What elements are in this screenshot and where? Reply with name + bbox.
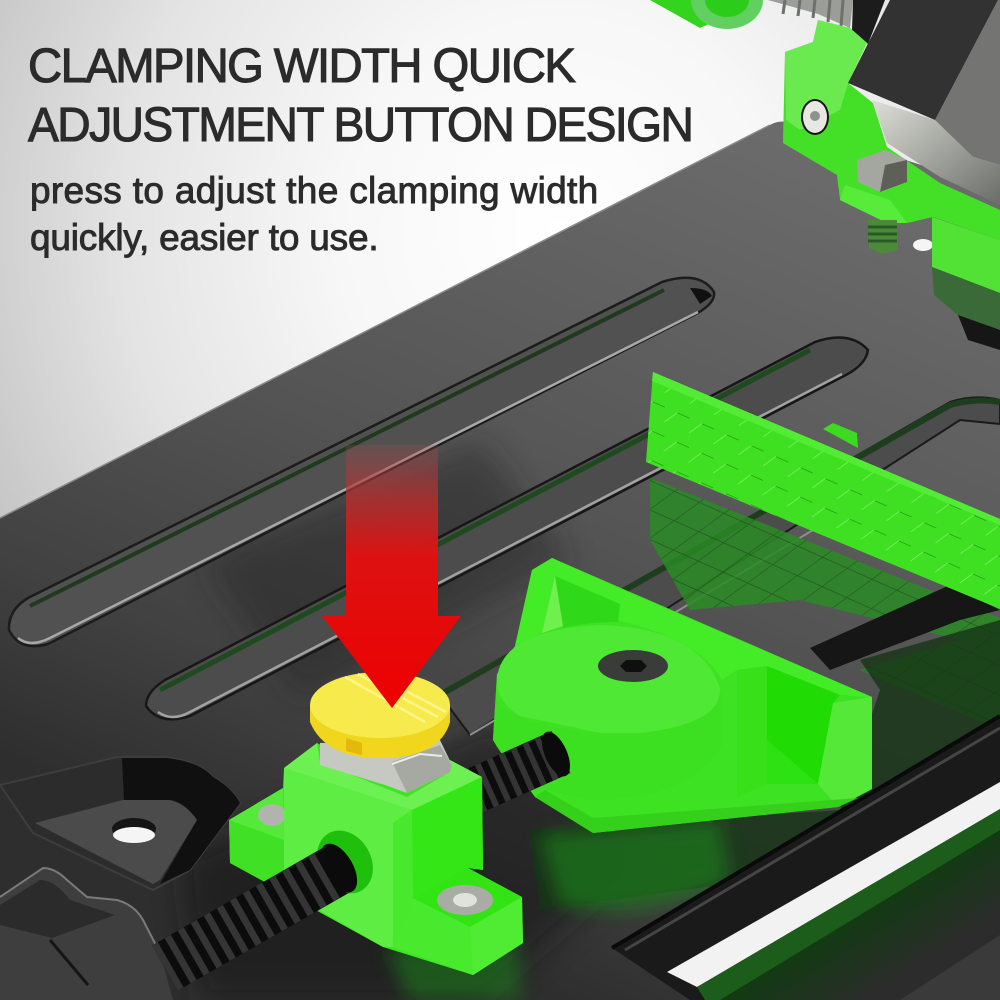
heading [27, 40, 692, 152]
yellow button [310, 672, 450, 758]
threaded rod: front [165, 838, 365, 968]
green angle block [493, 558, 872, 833]
heading: CLAMPING WIDTH QUICK [28, 40, 574, 93]
green reflections on plate [385, 478, 1000, 1000]
subheading [30, 170, 599, 258]
slot 3 [440, 397, 1000, 735]
threaded rod: rear [465, 728, 576, 795]
right flange [393, 898, 473, 975]
subheading: press to adjust the clamping width [30, 170, 599, 211]
green clamp base [229, 743, 523, 975]
lower guide rail [612, 716, 1000, 1000]
bottom-left recess [0, 757, 240, 1000]
thread hole shadow [306, 820, 384, 904]
metal slider [320, 740, 452, 793]
subheading: quickly, easier to use. [30, 217, 378, 258]
heading: ADJUSTMENT BUTTON DESIGN [28, 99, 692, 152]
green knurled fence [646, 372, 1000, 609]
soft shadows on plate [200, 440, 570, 700]
left flange [229, 788, 284, 840]
top-right motor assembly [650, 0, 1000, 350]
clamp knob [0, 868, 173, 1000]
slot 2 [146, 338, 868, 719]
red down arrow [322, 445, 461, 708]
slot 1 [9, 278, 714, 646]
